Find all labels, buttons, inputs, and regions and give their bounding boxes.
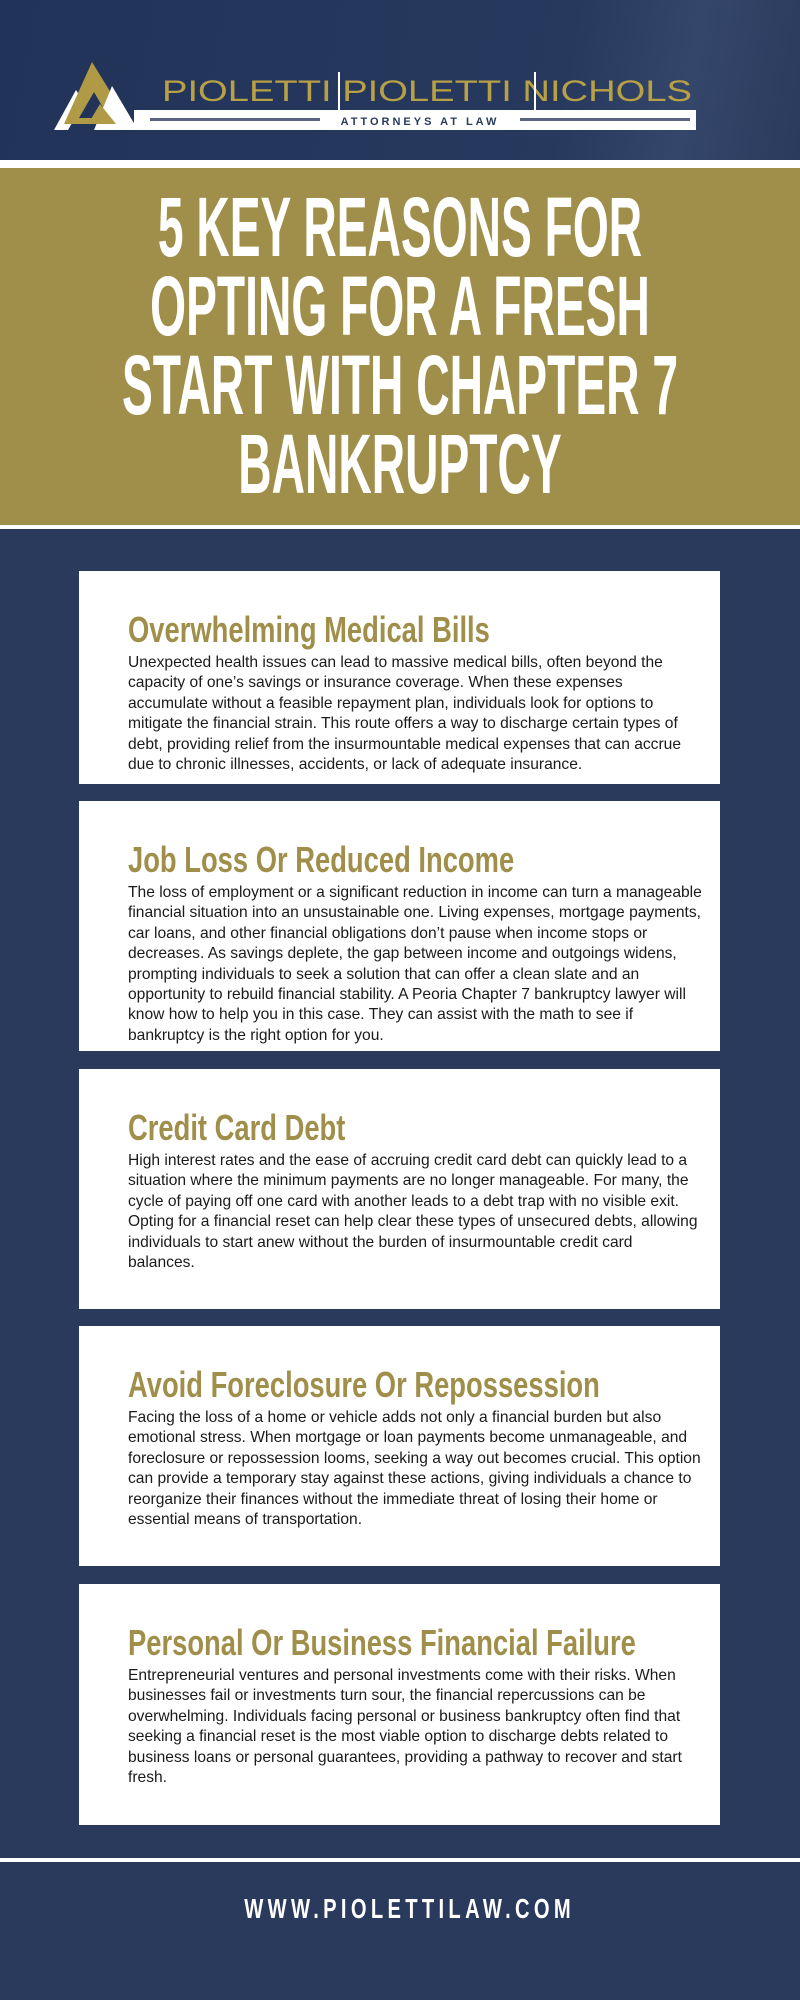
panel: foreclosure: Facing the loss of a home or vehicle adds not only a financial burden but also emotional stress. When mortgage or loan payments become unmanageable, and foreclosure or repossession looms, seeking a way out becomes crucial. This option can provide a temporary stay against these actions, giving individuals a chance to reorganize their finances without the immediate threat of losing their home or essential means of transportation. bbox=[128, 1409, 701, 1528]
panel: credit card debt: High interest rates and the ease of accruing credit card debt can quickly lead to a situation where the minimum payments are no longer manageable. For many, the cycle of paying off one card with another leads to a debt trap with no visible exit. Opting for a financial reset can help clear these types of unsecured debts, allowing individuals to start anew without the burden of insurmountable credit card balances. bbox=[128, 1152, 698, 1271]
panel: financial failure bbox=[79, 1584, 720, 1825]
panel: foreclosure: Avoid Foreclosure Or Repossession bbox=[128, 1364, 600, 1405]
logo bbox=[54, 62, 696, 130]
firm name: PIOLETTI PIOLETTI NICHOLS bbox=[162, 75, 692, 108]
icon: triangle mark bbox=[54, 62, 138, 130]
panel: job loss bbox=[79, 801, 720, 1051]
panel: foreclosure bbox=[79, 1326, 720, 1566]
panel: medical bills: Overwhelming Medical Bills bbox=[128, 609, 490, 650]
title: OPTING FOR A FRESH bbox=[150, 259, 650, 353]
panel: financial failure: Entrepreneurial ventures and personal investments come with their risks. When businesses fail or investments turn sour, the financial repercussions can be overwhelming. Individuals facing personal or business bankruptcy often find that seeking a financial reset is the most viable option to discharge debts related to business loans or personal guarantees, providing a pathway to recover and start fresh. bbox=[128, 1667, 682, 1786]
panel: financial failure: Personal Or Business Financial Failure bbox=[128, 1622, 636, 1663]
panel: job loss: Job Loss Or Reduced Income bbox=[128, 839, 514, 880]
title bbox=[122, 180, 678, 511]
panel: credit card debt: Credit Card Debt bbox=[128, 1107, 345, 1148]
panel: medical bills: Unexpected health issues can lead to massive medical bills, often beyond the capacity of one’s savings or insurance coverage. When these expenses accumulate without a feasible repayment plan, individuals look for options to mitigate the financial strain. This route offers a way to discharge certain types of debt, providing relief from the insurmountable medical expenses that can accrue due to chronic illnesses, accidents, or lack of adequate insurance. bbox=[128, 654, 681, 773]
tagline: ATTORNEYS AT LAW bbox=[341, 116, 499, 128]
panel: job loss: The loss of employment or a significant reduction in income can turn a manageable financial situation into an unsustainable one. Living expenses, mortgage payments, car loans, and other financial obligations don’t pause when income stops or decreases. As savings deplete, the gap between income and outgoings widens, prompting individuals to seek a solution that can offer a clean slate and an opportunity to rebuild financial stability. A Peoria Chapter 7 bankruptcy lawyer will know how to help you in this case. They can assist with the math to see if bankruptcy is the right option for you. bbox=[128, 884, 702, 1044]
title band bbox=[0, 168, 800, 525]
panel: medical bills bbox=[79, 571, 720, 784]
title: 5 KEY REASONS FOR bbox=[158, 180, 642, 274]
header: logo band bbox=[0, 0, 800, 160]
title: BANKRUPTCY bbox=[238, 417, 562, 511]
footer url: WWW.PIOLETTILAW.COM bbox=[245, 1893, 575, 1924]
panel: credit card debt bbox=[79, 1069, 720, 1309]
title: START WITH CHAPTER 7 bbox=[122, 338, 678, 432]
